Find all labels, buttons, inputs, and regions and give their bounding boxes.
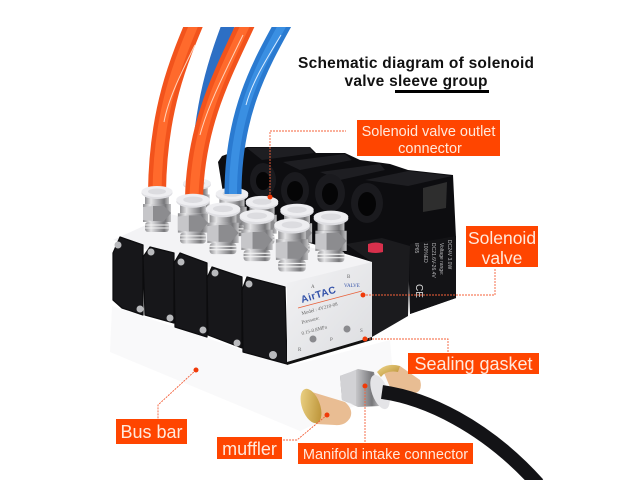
- title: Schematic diagram of solenoid: [298, 55, 534, 72]
- label: muffler: muffler: [222, 439, 277, 459]
- coil label panel: IP65: [413, 243, 419, 254]
- valve white end face: P: [330, 338, 333, 343]
- leader: solenoid valve: [360, 268, 495, 298]
- tube: rear blue: [194, 27, 234, 128]
- manifold intake connector: [340, 369, 394, 412]
- label: solenoid valve: [466, 226, 538, 268]
- valve white end face: R: [298, 348, 302, 353]
- label: sealing gasket: Sealing gasket: [414, 354, 533, 374]
- title: [298, 55, 534, 93]
- leader: muffler: [282, 412, 330, 440]
- label: solenoid valve outlet connector: [357, 120, 500, 157]
- coil label panel: DC21.6V-26.4V: [430, 243, 436, 278]
- valve white end face: VALVE: [344, 284, 360, 289]
- tube: orange left: [157, 15, 198, 192]
- valve white end face: Pressure:: [301, 316, 320, 326]
- manifold bus bar: [110, 306, 394, 431]
- leader: outlet connector: [268, 131, 346, 200]
- coil label panel: [410, 236, 456, 314]
- red manual button: [368, 242, 383, 253]
- title: valve sleeve group: [344, 73, 488, 90]
- front muffler: [296, 386, 351, 426]
- label: bus bar: Bus bar: [120, 422, 183, 442]
- label: solenoid valve: Solenoid: [468, 228, 536, 248]
- coil label panel: CE: [413, 284, 424, 298]
- black end plates: [113, 237, 287, 364]
- valve block top: [113, 214, 372, 288]
- fittings rear row: [183, 178, 248, 236]
- coil label panel: 100%ED: [422, 243, 428, 263]
- valve white end face: Model : 4V210-08: [301, 302, 339, 317]
- label: solenoid valve: valve: [482, 248, 522, 268]
- label: manifold intake connector: Manifold intake connector: [303, 447, 468, 463]
- plate screws: [114, 242, 277, 359]
- valve white end face: AirTAC: [300, 285, 337, 306]
- coil label panel: DC24V 3.0W: [446, 240, 452, 269]
- push-in fittings: [142, 186, 348, 271]
- coil label panel: Voltage range:: [438, 243, 444, 275]
- leader: bus bar: [158, 368, 198, 419]
- valve white end face: S: [360, 329, 363, 334]
- valve white end face: A: [311, 285, 315, 290]
- coil group: [218, 147, 456, 314]
- label: bus bar: [116, 419, 187, 444]
- black air hose: [382, 392, 538, 480]
- valve white end face: 0.15-0.8MPa: [301, 325, 328, 337]
- valve white end face: [287, 262, 372, 365]
- label: solenoid valve outlet connector: connector: [398, 141, 462, 157]
- leader: sealing gasket: [362, 336, 448, 353]
- tube: blue right: [233, 15, 288, 194]
- leader: intake connector: [362, 384, 368, 443]
- label: solenoid valve outlet connector: Solenoid valve outlet: [362, 124, 495, 140]
- tube: orange middle: [194, 15, 250, 198]
- rear muffler: [377, 365, 421, 393]
- valve white end face: B: [347, 275, 351, 280]
- dark valve body side: [346, 238, 410, 337]
